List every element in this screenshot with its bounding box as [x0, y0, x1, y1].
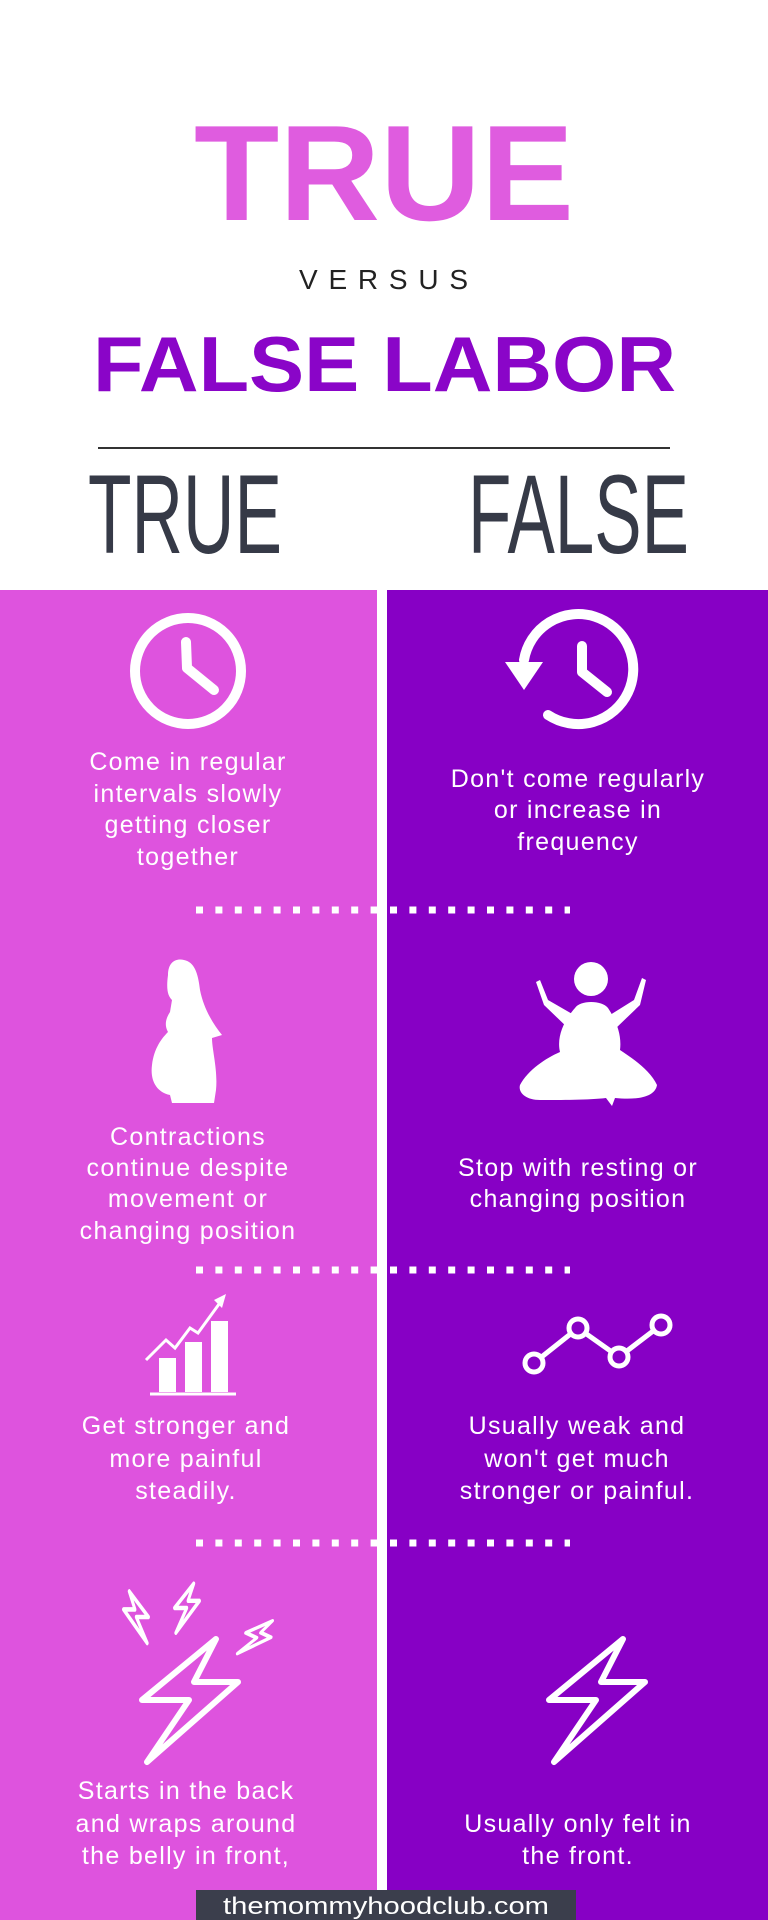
text: true row 3: steadily. — [135, 1477, 237, 1505]
panel: false column — [387, 590, 768, 1920]
text: false row 1 — [451, 765, 705, 856]
text: true row 3: more painful — [109, 1445, 263, 1473]
footer: website: themommyhoodclub.com — [223, 1893, 549, 1920]
divider dots — [196, 906, 570, 914]
icon: single lightning bolt — [549, 1639, 645, 1762]
text: true row 2 — [80, 1123, 296, 1245]
text: false row 2: changing position — [470, 1185, 686, 1213]
column heading: TRUE: TRUE — [88, 452, 282, 577]
text: true row 4 — [76, 1777, 296, 1870]
text: true row 1: together — [137, 843, 239, 871]
text: false row 2 — [458, 1154, 698, 1213]
icon: history clock — [505, 614, 633, 724]
footer: website — [196, 1890, 576, 1920]
icon: meditating pregnant woman — [520, 962, 657, 1106]
text: false row 4: Usually only felt in — [464, 1810, 692, 1838]
text: false row 3: Usually weak and — [469, 1412, 685, 1440]
text: true row 4: and wraps around — [76, 1810, 296, 1838]
text: false row 1: Don't come regularly — [451, 765, 705, 793]
text: true row 3: Get stronger and — [82, 1412, 290, 1440]
text: true row 2: Contractions — [110, 1123, 266, 1151]
text: false row 3 — [460, 1412, 694, 1505]
text: true row 1: getting closer — [105, 811, 271, 839]
text: true row 1 — [89, 748, 287, 871]
icon: flat line chart — [525, 1316, 670, 1372]
text: true row 4: the belly in front, — [82, 1842, 290, 1870]
text: true row 2: movement or — [108, 1185, 268, 1213]
text: true row 2: continue despite — [87, 1154, 289, 1182]
text: true row 3 — [82, 1412, 290, 1505]
icon: rising bar chart — [146, 1294, 236, 1394]
icon: clock — [135, 618, 241, 724]
text: true row 4: Starts in the back — [78, 1777, 294, 1805]
title: TRUE: TRUE — [194, 97, 574, 249]
panel: true column — [0, 590, 377, 1920]
text: true row 1: intervals slowly — [94, 780, 282, 808]
text: true row 2: changing position — [80, 1217, 296, 1245]
icon: multiple lightning bolts — [124, 1584, 278, 1762]
divider dots — [196, 1266, 570, 1274]
icon: pregnant silhouette — [152, 960, 222, 1103]
title: FALSE LABOR: FALSE LABOR — [93, 320, 676, 408]
text: false row 4: the front. — [522, 1842, 634, 1870]
text: false row 3: won't get much — [483, 1445, 670, 1473]
text: false row 1: or increase in — [494, 796, 662, 824]
text: false row 4 — [464, 1810, 692, 1870]
text: false row 1: frequency — [517, 828, 639, 856]
divider dots — [196, 1540, 570, 1546]
text: true row 1: Come in regular — [89, 748, 287, 776]
text: false row 2: Stop with resting or — [458, 1154, 698, 1182]
text: false row 3: stronger or painful. — [460, 1477, 694, 1505]
subtitle: versus: VERSUS — [299, 264, 468, 295]
